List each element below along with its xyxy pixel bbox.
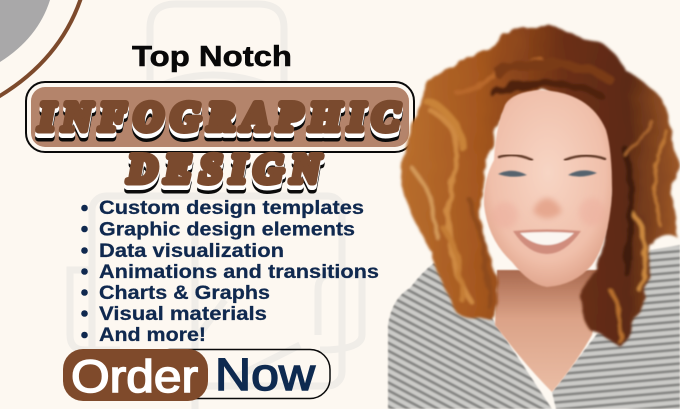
feature list: And more! [99,325,206,346]
title: INFOGRAPHIC: INFOGRAPHIC [38,94,400,139]
eyebrows [499,155,605,160]
neck and chest [495,270,605,392]
bullets [81,205,88,338]
corner decoration: grey quarter circle [0,0,50,62]
title banner [26,82,414,152]
button brown part [63,349,208,401]
feature list: Charts & Graphs [99,283,270,304]
feature list: Graphic design elements [99,220,355,240]
eyes [498,170,597,177]
photo: smiling woman [388,26,680,409]
title: DESIGN: DESIGN [127,150,322,196]
mouth [513,230,581,254]
nose shading [533,198,562,218]
heading: Top Notch: Top Notch [132,41,292,73]
title: INFOGRAPHIC: INFOGRAPHIC [38,102,400,147]
hair highlights [414,60,665,340]
list items: Custom design templates [99,198,364,219]
feature list: Data visualization [99,241,284,262]
feature list [81,198,379,346]
cheek blush [492,198,605,228]
watermark icon [70,4,362,409]
banner fill [31,87,409,147]
hair [401,26,678,347]
Now: Now [215,349,316,400]
title: DESIGN: DESIGN [127,154,322,199]
button outline [150,350,330,398]
title: DESIGN: DESIGN [127,146,322,191]
Order: Order [71,351,198,402]
banner outline [26,82,414,152]
title: INFOGRAPHIC: INFOGRAPHIC [38,98,400,144]
face [484,90,612,287]
feature list: Animations and transitions [99,262,379,283]
feature list: Visual materials [99,304,267,325]
corner decoration: brown arc [0,0,81,97]
shirt [388,245,680,409]
order now button [63,349,330,402]
